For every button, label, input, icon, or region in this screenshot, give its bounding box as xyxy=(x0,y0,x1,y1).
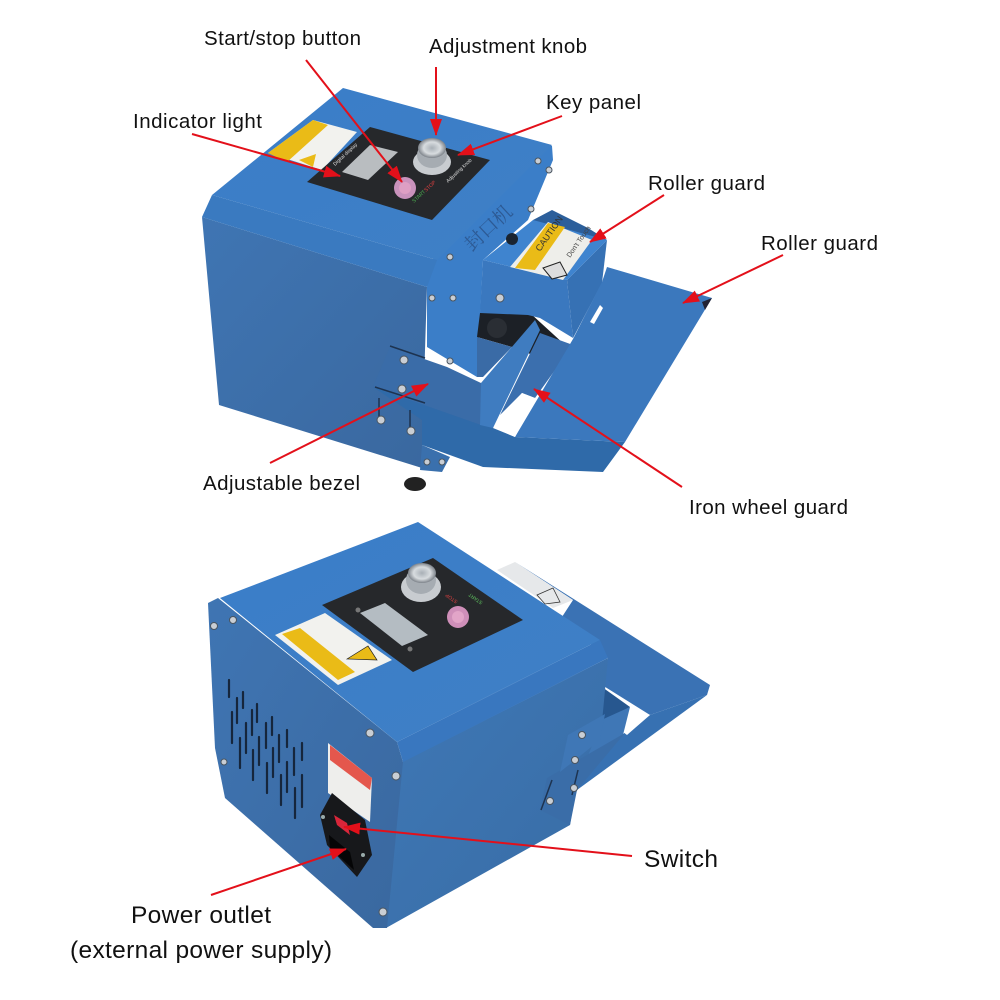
top machine xyxy=(202,88,712,491)
label: adjustable bezel: Adjustable bezel xyxy=(203,472,360,495)
control panel: START xyxy=(468,591,484,605)
label: key panel: Key panel xyxy=(546,91,641,114)
caution label: Don't Touch xyxy=(566,225,593,259)
label: iron wheel guard: Iron wheel guard xyxy=(689,496,848,519)
arrow: power outlet xyxy=(211,849,346,895)
iron wheel guard xyxy=(480,320,540,428)
right face xyxy=(386,658,608,928)
arrow: indicator light xyxy=(192,134,340,176)
roller guard cover xyxy=(480,220,607,338)
arrow: iron wheel guard xyxy=(534,389,682,487)
arrow: adjustment knob xyxy=(435,67,437,135)
control panel: STOP xyxy=(444,591,459,604)
right side panel xyxy=(427,145,553,377)
lower rear bracket xyxy=(420,445,450,472)
arrow: adjustable bezel xyxy=(270,384,428,463)
caution label: CAUTION xyxy=(533,214,565,253)
adjustment knob xyxy=(401,563,441,602)
control panel: Digital display xyxy=(332,142,359,167)
inner guard xyxy=(598,687,630,725)
machine print: 封口机 xyxy=(460,201,517,256)
warning label xyxy=(275,613,392,685)
control panel xyxy=(322,558,523,672)
control panel: Adjusting knob xyxy=(445,158,474,184)
label: roller guard tray: Roller guard xyxy=(761,232,878,255)
arrow: switch xyxy=(344,827,632,856)
bezel screws xyxy=(546,732,586,804)
screws xyxy=(377,158,552,465)
label: start/stop button: Start/stop button xyxy=(204,27,361,50)
control panel: STOP xyxy=(423,179,438,193)
arrow: start/stop button xyxy=(306,60,402,182)
chamfer xyxy=(397,640,608,762)
warning label xyxy=(268,120,357,170)
chamfer xyxy=(202,195,437,287)
label: external power supply: (external power supply) xyxy=(70,937,332,964)
label: roller guard: Roller guard xyxy=(648,172,765,195)
left face xyxy=(202,217,427,468)
rear label xyxy=(497,562,573,608)
arrow: roller guard tray xyxy=(683,255,783,303)
tray underside xyxy=(575,695,707,790)
white gap xyxy=(623,707,650,735)
control panel xyxy=(307,127,490,220)
left face xyxy=(208,598,403,928)
lower bezel xyxy=(540,733,625,825)
bottom machine xyxy=(208,522,710,928)
vents xyxy=(229,680,302,818)
label: adjustment knob: Adjustment knob xyxy=(429,35,587,58)
screws xyxy=(210,616,400,916)
danger label xyxy=(328,743,372,822)
power socket xyxy=(320,793,372,877)
label: switch: Switch xyxy=(644,846,718,873)
label: indicator light: Indicator light xyxy=(133,110,262,133)
bezel xyxy=(560,707,630,772)
caution label xyxy=(510,214,593,280)
top face xyxy=(220,522,600,742)
arrow: key panel xyxy=(458,116,562,155)
control panel: START xyxy=(411,189,427,204)
tray top xyxy=(515,562,710,715)
adjustment knob xyxy=(413,138,451,175)
roller mechanism xyxy=(477,210,607,415)
roller guard tray xyxy=(373,267,712,472)
foot xyxy=(404,477,426,491)
top face xyxy=(212,88,552,260)
label: power outlet: Power outlet xyxy=(131,902,271,929)
adjustable bezel xyxy=(373,346,481,433)
arrow: roller guard cover xyxy=(590,195,664,242)
upper bezel plate xyxy=(560,714,605,772)
